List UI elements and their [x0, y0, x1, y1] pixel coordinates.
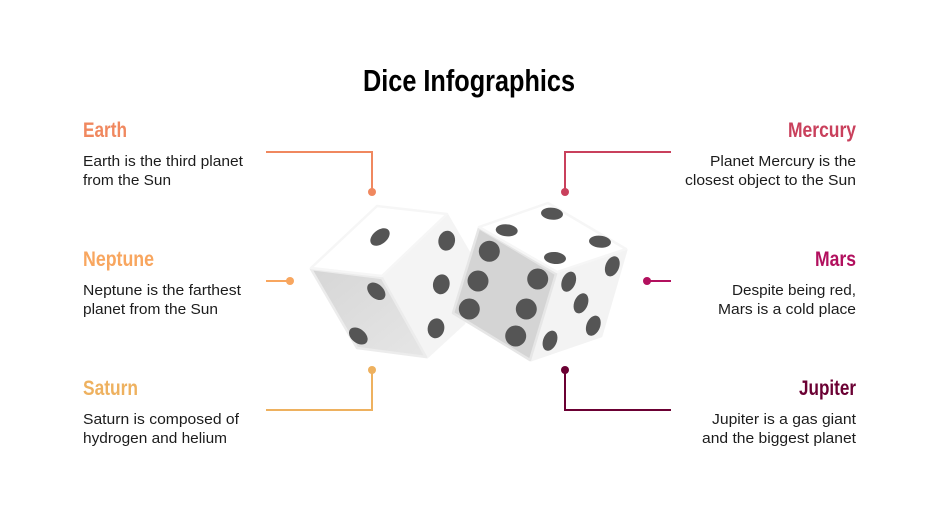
heading: Earth: Earth	[83, 119, 127, 142]
panel: Earth	[83, 119, 376, 196]
connector: Jupiter	[561, 366, 671, 410]
text block: Neptune: planet from the Sun	[83, 302, 218, 318]
connector: Mars	[643, 277, 671, 285]
panel: Jupiter	[561, 366, 856, 447]
text block: Mercury: closest object to the Sun	[685, 173, 856, 189]
heading: Neptune: Neptune	[83, 248, 154, 271]
text block: Saturn	[83, 412, 240, 447]
text block: Earth: from the Sun	[83, 173, 171, 189]
text block: Earth	[83, 154, 243, 189]
connector: Saturn	[266, 366, 376, 410]
text block: Mars	[718, 283, 856, 318]
icon: right die	[453, 203, 626, 360]
text block: Neptune	[83, 283, 241, 318]
connector: Earth	[266, 152, 376, 196]
panel: Neptune	[83, 248, 294, 318]
text block: Earth: Earth is the third planet	[83, 154, 243, 170]
heading: Mercury: Mercury	[788, 119, 856, 142]
title: Dice Infographics	[363, 63, 575, 98]
icon: left die	[311, 206, 469, 357]
heading: Jupiter: Jupiter	[799, 377, 856, 400]
text block: Jupiter	[702, 412, 856, 447]
text block: Jupiter: and the biggest planet	[702, 431, 856, 447]
text block: Saturn: hydrogen and helium	[83, 431, 227, 447]
text block: Saturn: Saturn is composed of	[83, 412, 240, 428]
heading: Saturn: Saturn	[83, 377, 138, 400]
panel: Mars	[643, 248, 856, 318]
connector: Mercury	[561, 152, 671, 196]
panel: Mercury	[561, 119, 856, 196]
text block: Jupiter: Jupiter is a gas giant	[712, 412, 856, 428]
text block: Mercury	[685, 154, 856, 189]
panel: Saturn	[83, 366, 376, 447]
text block: Mars: Despite being red,	[732, 283, 856, 299]
text block: Neptune: Neptune is the farthest	[83, 283, 241, 299]
text block: Mercury: Planet Mercury is the	[710, 154, 856, 170]
text block: Mars: Mars is a cold place	[718, 302, 856, 318]
heading: Mars: Mars	[815, 248, 856, 271]
connector: Neptune	[266, 277, 294, 285]
